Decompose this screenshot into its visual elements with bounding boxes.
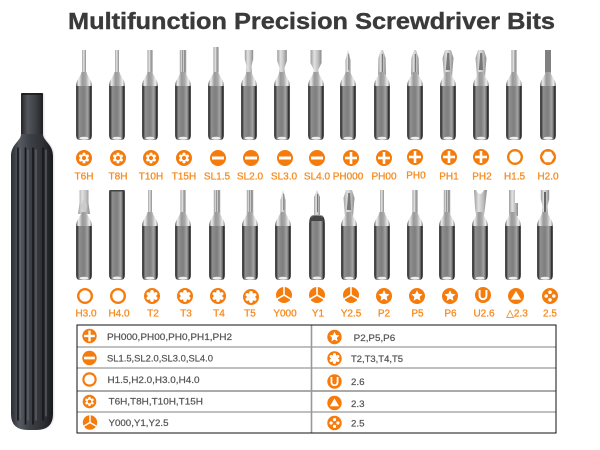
bit Y000: Y000 bbox=[273, 308, 297, 320]
bit PH000 bbox=[333, 50, 364, 182]
row: triangle 2.3: 2.3 bbox=[351, 399, 364, 410]
row: four-point 2.5 bbox=[327, 416, 364, 430]
bit PH000: PH000 bbox=[333, 172, 364, 182]
row: hex: H1.5,H2.0,H3.0,H4.0 bbox=[108, 375, 200, 386]
bit T2: T2 bbox=[147, 308, 159, 320]
bit H3.0 bbox=[75, 190, 97, 320]
bit T4 bbox=[209, 190, 226, 320]
bit H2.0: H2.0 bbox=[537, 172, 559, 182]
bit H2.0 bbox=[537, 50, 559, 182]
bit PH0 bbox=[406, 50, 426, 182]
bit T3 bbox=[175, 190, 193, 320]
row: pentalobe: P2,P5,P6 bbox=[354, 333, 395, 344]
row: U 2.6: 2.6 bbox=[351, 377, 364, 388]
bit T15H: T15H bbox=[172, 172, 196, 182]
bit P6: P6 bbox=[444, 308, 457, 320]
bit Y2.5 bbox=[341, 190, 362, 320]
bit T10H bbox=[139, 50, 163, 182]
bit SL1.5: SL1.5 bbox=[204, 172, 231, 182]
bit T5 bbox=[242, 190, 259, 320]
bit H1.5 bbox=[504, 50, 525, 182]
row: torx: T2,T3,T4,T5 bbox=[351, 354, 403, 365]
bit Y1 bbox=[309, 190, 325, 320]
bit H4.0: H4.0 bbox=[108, 308, 130, 320]
bit T6H bbox=[75, 50, 93, 182]
row: four-point 2.5: 2.5 bbox=[351, 418, 364, 430]
row: hollow torx: T6H,T8H,T10H,T15H bbox=[108, 396, 203, 408]
bit P5 bbox=[407, 190, 425, 320]
bit H4.0 bbox=[108, 190, 130, 320]
bit PH00: PH00 bbox=[371, 172, 397, 182]
bit T2 bbox=[142, 190, 160, 320]
bit SL4.0: SL4.0 bbox=[304, 172, 331, 182]
bit P5: P5 bbox=[411, 308, 424, 320]
row: U 2.6 bbox=[327, 374, 364, 389]
bit 2.5: 2.5 bbox=[543, 308, 557, 320]
row: Phillips bbox=[82, 329, 232, 343]
bit P6 bbox=[439, 190, 458, 320]
bit U2.6 bbox=[472, 190, 495, 320]
bit T4: T4 bbox=[213, 308, 225, 320]
bit triangle 2.3: △2.3 bbox=[506, 308, 528, 320]
bit H3.0: H3.0 bbox=[75, 308, 97, 320]
bit PH2: PH2 bbox=[472, 172, 492, 182]
bit H1.5: H1.5 bbox=[504, 172, 525, 182]
bit PH1 bbox=[439, 50, 459, 182]
bit T10H: T10H bbox=[139, 172, 163, 182]
row: slotted: SL1.5,SL2.0,SL3.0,SL4.0 bbox=[107, 354, 213, 364]
row: slotted bbox=[82, 351, 213, 365]
bit U2.6: U2.6 bbox=[473, 308, 495, 320]
bit PH00 bbox=[371, 50, 397, 182]
screwdriver handle bbox=[11, 93, 54, 430]
bit PH2 bbox=[472, 50, 492, 182]
bit Y000 bbox=[273, 190, 297, 320]
bit T6H: T6H bbox=[75, 172, 93, 182]
row: hex bbox=[82, 372, 200, 387]
bit T8H: T8H bbox=[109, 172, 127, 182]
row: Phillips: PH000,PH00,PH0,PH1,PH2 bbox=[107, 332, 232, 343]
row: torx bbox=[327, 351, 403, 366]
bit PH0: PH0 bbox=[406, 170, 426, 182]
bit SL4.0 bbox=[304, 50, 331, 182]
bit 2.5 bbox=[537, 190, 558, 320]
title: Multifunction Precision Screwdriver Bits bbox=[68, 8, 555, 34]
bit P2 bbox=[374, 190, 392, 320]
bit Y2.5: Y2.5 bbox=[341, 308, 362, 320]
row: pentalobe bbox=[327, 330, 395, 344]
bit SL3.0 bbox=[271, 50, 298, 182]
reference table bbox=[77, 325, 556, 433]
row: hollow torx bbox=[83, 395, 203, 408]
bit SL1.5 bbox=[204, 47, 231, 182]
row: tri-wing: Y000,Y1,Y2.5 bbox=[108, 418, 168, 429]
bit T15H bbox=[172, 50, 196, 182]
row: triangle 2.3 bbox=[327, 396, 364, 410]
bit Y1: Y1 bbox=[312, 308, 325, 320]
bit SL3.0: SL3.0 bbox=[271, 172, 298, 182]
bit SL2.0: SL2.0 bbox=[237, 172, 264, 182]
bit P2: P2 bbox=[378, 308, 391, 320]
bit T8H bbox=[109, 50, 127, 182]
bit T5: T5 bbox=[244, 308, 256, 320]
bit triangle 2.3 bbox=[505, 190, 528, 320]
bit T3: T3 bbox=[180, 308, 192, 320]
bit PH1: PH1 bbox=[439, 172, 459, 182]
bit SL2.0 bbox=[237, 50, 264, 182]
row: tri-wing bbox=[83, 415, 168, 430]
